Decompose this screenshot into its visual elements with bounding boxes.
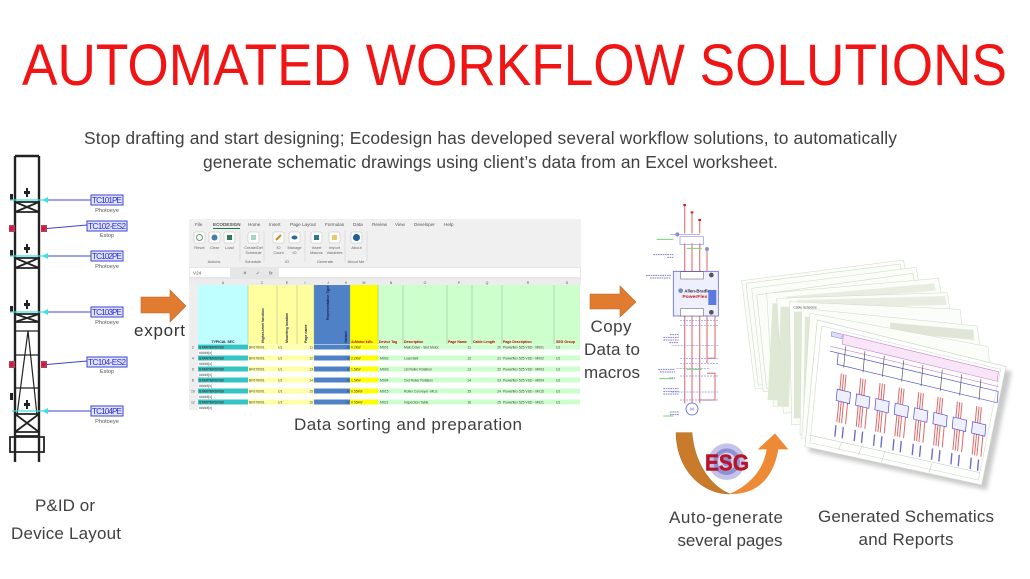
device tag: TC102PE: TC102PE: [92, 252, 123, 261]
caption: Auto-generate several pages: Auto-generate: [669, 508, 783, 527]
intro text: generate schematic drawings using client’s data from an Excel worksheet.: [203, 152, 778, 172]
ribbon buttons: Clear: [210, 245, 220, 250]
data rows: 15: [467, 390, 471, 394]
ribbon background: [189, 219, 581, 267]
data rows: M021: [380, 400, 389, 404]
header row: SEG Group: [556, 340, 575, 344]
page 5: [789, 302, 973, 425]
schematic pages fan: [742, 260, 1012, 490]
column letters: E: [286, 281, 289, 285]
ribbon tabs: Developer: [414, 222, 435, 227]
header row: [198, 285, 580, 344]
column letters: P: [458, 281, 461, 285]
page 5: Cable Schedule: [793, 306, 817, 310]
device tag: TC102PE: Photoeye: [95, 264, 119, 270]
ribbon buttons: IO: [292, 250, 297, 255]
column letters: S: [566, 281, 569, 285]
data rows: 12: [309, 356, 313, 360]
ribbon tabs: File: [195, 222, 203, 227]
data rows: #####[x]: [199, 384, 212, 388]
column letters: K: [345, 281, 348, 285]
page 1: [742, 260, 930, 388]
data rows: #####[x]: [199, 395, 212, 399]
device tag: TC101PE: TC101PE: [92, 196, 123, 205]
data rows: 20: [497, 346, 501, 350]
data rows: U1: [556, 378, 560, 382]
data rows: #####[x]: [199, 373, 212, 377]
header row: Page Description: [503, 340, 532, 344]
formula bar: V24: [193, 270, 202, 276]
header row: Representation Type: [326, 286, 330, 320]
schematic drawing: [822, 332, 1000, 474]
motor symbols: [10, 188, 30, 409]
data rows: 14: [309, 378, 313, 382]
header row: Mounting location: [285, 313, 289, 343]
caption: Generated Schematics and Reports: Generated Schematics: [818, 507, 994, 526]
data rows: M003: [380, 368, 389, 372]
PowerFlex drive box: Allen-Bradley: [684, 288, 713, 293]
data rows: U1: [278, 378, 282, 382]
header row: Description: [404, 340, 423, 344]
data rows: STARTERSVSD: [199, 378, 225, 382]
data rows: M002: [380, 356, 389, 360]
caption: Generated Schematics and Reports: [818, 507, 994, 549]
device tag: TC104-ES2: TC104-ES2: [88, 358, 126, 367]
data rows: 9.2kW: [351, 346, 361, 350]
data rows: 6: [192, 368, 194, 372]
arrow: export: [141, 290, 186, 322]
ribbon buttons: IO: [276, 245, 281, 250]
data rows: BF676001: [249, 378, 265, 382]
motor: M: [690, 407, 694, 412]
data rows: 12: [467, 356, 471, 360]
label: Copy Data to macros: [584, 317, 640, 382]
data rows: 13: [467, 368, 471, 372]
data rows: STARTERSVSD: [199, 346, 225, 350]
ribbon buttons: Schedule: [245, 250, 262, 255]
ribbon buttons: Schedule: [245, 259, 261, 264]
data rows: 14: [467, 378, 471, 382]
device tag: TC103PE: [91, 307, 123, 326]
ribbon tabs: View: [395, 222, 406, 227]
ribbon tabs: Data: [353, 222, 363, 227]
ribbon buttons: Variables: [327, 250, 343, 255]
device tag: TC103PE: TC103PE: [92, 308, 123, 317]
column letters: I: [305, 281, 306, 285]
device tag: TC102-ES2: [87, 221, 127, 239]
device tag: TC101PE: Photoeye: [95, 208, 119, 214]
ribbon tabs: Formulas: [325, 222, 345, 227]
data rows: Powerflex 525 VSD - M003: [503, 368, 544, 372]
data rows: #####[x]: [199, 406, 212, 410]
page 2: [752, 267, 940, 392]
column letters: O: [424, 281, 427, 285]
data rows: U1: [278, 346, 282, 350]
data rows: U1: [278, 400, 282, 404]
page shadow: [808, 330, 1012, 490]
data rows: 0.55kW: [351, 390, 363, 394]
header row: Higher-level function: [261, 308, 265, 343]
data rows: STARTERSVSD: [199, 368, 225, 372]
sensor beams and leader lines: [10, 197, 91, 414]
data rows: M004: [380, 378, 389, 382]
header row: Page Name: [448, 340, 467, 344]
data rows: 22: [497, 368, 501, 372]
column letters: M: [363, 281, 366, 285]
caption: Generated Schematics and Reports: and Reports: [858, 530, 954, 549]
ribbon buttons: [194, 231, 367, 264]
PowerFlex drive box: PowerFlex: [682, 294, 707, 300]
data rows: U1: [556, 356, 560, 360]
data rows: BF676001: [249, 400, 265, 404]
arrow up: [729, 433, 788, 494]
data rows: 8: [192, 378, 194, 382]
estop markers: [9, 225, 47, 368]
ribbon buttons: Actions: [208, 259, 220, 264]
data rows: Powerflex 525 VSD - M004: [503, 378, 544, 382]
data rows: BF676001: [249, 346, 265, 350]
data rows: Powerflex 525 VSD - M021: [503, 400, 544, 404]
header row: Device Tag: [379, 340, 397, 344]
data rows: 4: [192, 356, 194, 360]
device tag: TC104PE: Photoeye: [95, 419, 119, 425]
ribbon buttons: About: [351, 245, 363, 250]
breaker: [670, 232, 709, 251]
caption: P&ID or Device Layout: [11, 496, 121, 543]
ribbon tabs: Page Layout: [290, 222, 317, 227]
arrow down: [676, 433, 730, 494]
page 3: [767, 278, 960, 407]
power lines: [683, 204, 715, 403]
data rows: Powerflex 525 VSD - M002: [503, 356, 544, 360]
label: export: export: [134, 321, 185, 340]
arrow: auto-generate loop: [676, 433, 788, 494]
header row: Page name: [304, 324, 308, 343]
data rows: 15: [309, 390, 313, 394]
caption: P&ID or Device Layout: Device Layout: [11, 524, 121, 543]
data rows: 12: [191, 400, 195, 404]
motor: [686, 403, 698, 415]
page 7: [802, 313, 993, 438]
data rows: U1: [556, 368, 560, 372]
data rows: Roller Conveyor -MLS: [404, 390, 438, 394]
caption: Data sorting and preparation: Data sorting and preparation: [294, 415, 522, 434]
header row: TYPICAL SEC: [211, 340, 235, 344]
ribbon tabs: [195, 222, 454, 229]
ribbon buttons: Macros: [310, 250, 323, 255]
data rows: Inspection Table: [404, 400, 429, 404]
data rows: A: [347, 356, 350, 360]
formula bar: [189, 267, 581, 279]
ribbon tabs: Review: [372, 222, 388, 227]
data rows: #####[x]: [199, 362, 212, 366]
column letters: J: [327, 281, 329, 285]
data rows: 16: [467, 400, 471, 404]
contactors and overload: [672, 321, 718, 400]
panel: P&ID device layout: [9, 156, 127, 462]
data rows: [191, 344, 580, 410]
data rows: A: [347, 400, 350, 404]
data rows: #####[x]: [199, 351, 212, 355]
annotations: [646, 239, 702, 416]
data rows: STARTERSVSD: [199, 356, 225, 360]
device tag: TC102-ES2: TC102-ES2: [88, 222, 126, 231]
data rows: Load Belt: [404, 356, 418, 360]
formula bar: ✓: [256, 270, 260, 276]
formula bar: ✕: [243, 270, 247, 276]
data rows: U1: [278, 356, 282, 360]
data rows: M015: [380, 390, 389, 394]
device tag: TC104-ES2: Estop: [100, 369, 114, 375]
ribbon buttons: IO: [285, 259, 289, 264]
ESG logo: ESG: [705, 449, 749, 475]
device tag: TC104PE: [91, 406, 123, 425]
data rows: BF676001: [249, 368, 265, 372]
data rows: STARTERSVSD: [199, 390, 225, 394]
data rows: 16: [309, 400, 313, 404]
intro text: [84, 128, 897, 172]
header row: Cable Length: [473, 340, 495, 344]
device tag: TC102PE: [91, 251, 123, 270]
data rows: M001: [380, 346, 389, 350]
data rows: BF676001: [249, 356, 265, 360]
caption: Auto-generate several pages: [669, 508, 783, 550]
ribbon tabs: Insert: [269, 222, 281, 227]
page title block: [809, 435, 980, 473]
ribbon tabs: Help: [444, 222, 454, 227]
ribbon buttons: Reset: [194, 245, 205, 250]
arrow: copy data: [590, 286, 636, 317]
ribbon buttons: Manage: [287, 245, 302, 250]
data rows: A: [347, 390, 350, 394]
data rows: A: [347, 346, 350, 350]
data rows: 2nd Roller Rotation: [404, 378, 433, 382]
PowerFlex drive box: [673, 271, 718, 316]
panel: Excel worksheet: [189, 219, 581, 410]
data rows: A: [347, 378, 350, 382]
intro text: Stop drafting and start designing; Ecodesign has developed several workflow solutions, to automatically: [84, 128, 897, 148]
data rows: 1st Roller Rotation: [404, 368, 432, 372]
data rows: 21: [497, 356, 501, 360]
data rows: 2.2kW: [351, 356, 361, 360]
label: Copy Data to macros: Data to: [584, 340, 640, 359]
column letters: C: [261, 281, 264, 285]
data rows: 23: [497, 378, 501, 382]
ribbon buttons: Load: [225, 245, 234, 250]
data rows: U1: [556, 346, 560, 350]
data rows: U1: [278, 368, 282, 372]
data rows: 1.5kW: [351, 378, 361, 382]
header row: 4=Motor kW=: [351, 340, 373, 344]
data rows: 11: [309, 346, 313, 350]
page 6: [800, 308, 988, 435]
data rows: BF676001: [249, 390, 265, 394]
caption: P&ID or Device Layout: P&ID or: [35, 496, 95, 515]
ribbon buttons: Import: [329, 245, 341, 250]
column letters: A: [222, 281, 225, 285]
page 4: [777, 293, 963, 413]
label: Copy Data to macros: Copy: [590, 317, 632, 336]
data rows: 1.5kW: [351, 368, 361, 372]
data rows: 10: [191, 390, 195, 394]
conveyor tower structure: [10, 156, 44, 462]
device tag: TC102-ES2: Estop: [100, 233, 114, 239]
ribbon buttons: About Me: [348, 259, 364, 264]
column letters: R: [527, 281, 530, 285]
label: Copy Data to macros: macros: [584, 363, 640, 382]
page 8: front schematic: [805, 320, 1006, 485]
data rows: 11: [467, 346, 471, 350]
header row: Variant: [344, 330, 348, 343]
data rows: Powerflex 525 VSD - M001: [503, 346, 544, 350]
device tag: TC104PE: TC104PE: [92, 407, 123, 416]
ribbon tabs: ECODESIGN: [213, 222, 241, 227]
ribbon tabs: Home: [248, 222, 261, 227]
schematic: drive circuit: [646, 204, 718, 416]
device tag: TC101PE: [91, 195, 123, 214]
ribbon buttons: Create/Del: [244, 245, 263, 250]
data rows: Main Drive - Slot Motor: [404, 346, 440, 350]
caption: Auto-generate several pages: several pages: [678, 531, 782, 550]
column letters: Q: [486, 281, 489, 285]
data rows: A: [347, 368, 350, 372]
column letters: [189, 279, 581, 410]
ribbon buttons: Insert: [312, 245, 322, 250]
formula bar: fx: [269, 270, 273, 276]
ribbon buttons: Generate: [317, 259, 333, 264]
data rows: U1: [278, 390, 282, 394]
device tag: TC104-ES2: [87, 357, 127, 375]
data rows: STARTERSVSD: [199, 400, 225, 404]
device tag: TC103PE: Photoeye: [95, 320, 119, 326]
data rows: 0.55kW: [351, 400, 363, 404]
data rows: U1: [556, 390, 560, 394]
data rows: Powerflex 525 VSD - M015: [503, 390, 544, 394]
ribbon buttons: Count: [273, 250, 285, 255]
data rows: 24: [497, 390, 501, 394]
column letters: N: [390, 281, 393, 285]
data rows: 13: [309, 368, 313, 372]
data rows: U1: [556, 400, 560, 404]
data rows: 25: [497, 400, 501, 404]
data rows: 2: [192, 346, 194, 350]
